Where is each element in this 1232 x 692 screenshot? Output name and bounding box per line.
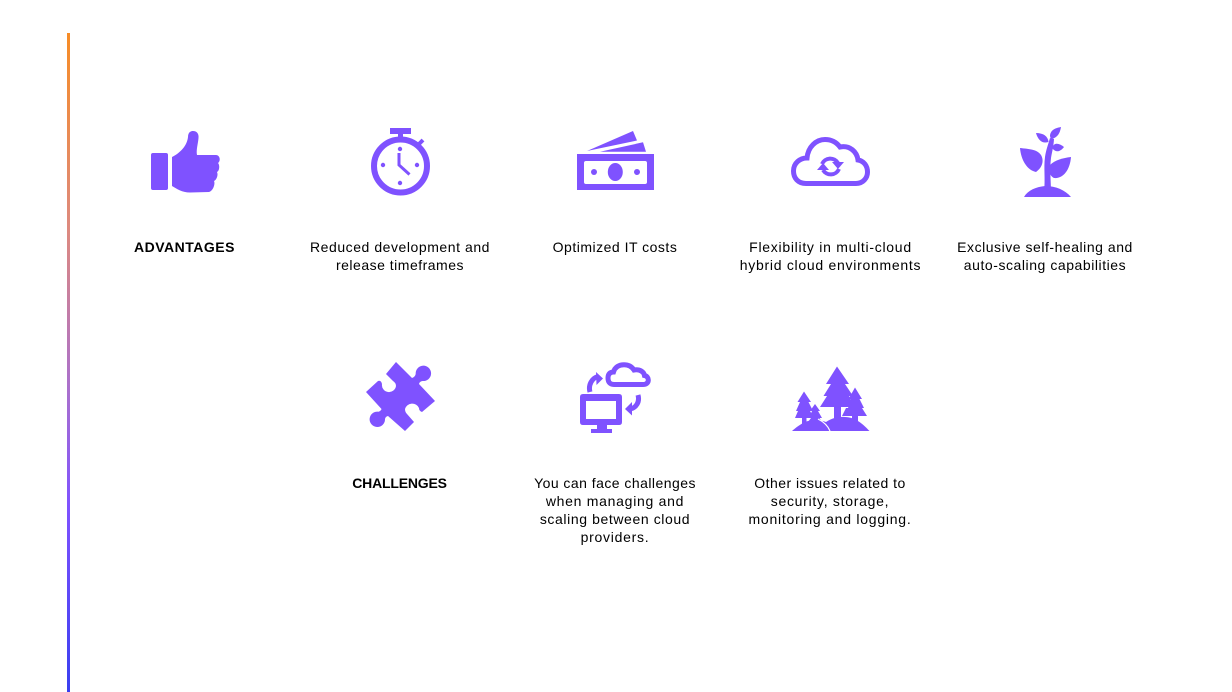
- text: multi-cloud flexibility: [740, 239, 921, 273]
- gradient vertical rule: [67, 33, 70, 692]
- icon: banknotes: [577, 131, 654, 190]
- text: cloud provider challenges: scaling between cloud: [540, 511, 690, 527]
- text: other issues: monitoring and logging.: [748, 511, 912, 527]
- text: cloud provider challenges: providers.: [581, 529, 649, 545]
- icon: cloud with sync arrows: [794, 140, 868, 184]
- heading: challenges: CHALLENGES: [352, 475, 447, 491]
- text: self-healing: Exclusive self-healing and: [957, 239, 1133, 255]
- icon: puzzle piece: [366, 362, 435, 431]
- text: cloud provider challenges: You can face challenges: [534, 475, 696, 491]
- text: self-healing: [957, 239, 1133, 273]
- text: reduced development: release timeframes: [336, 257, 464, 273]
- heading: advantages: ADVANTAGES: [134, 239, 235, 255]
- text: optimized IT costs: Optimized IT costs: [553, 239, 677, 255]
- icon: sprouting plant: [1020, 127, 1071, 197]
- text: multi-cloud flexibility: Flexibility in multi-cloud: [749, 239, 912, 255]
- icon: forest of pine trees: [792, 366, 870, 431]
- text: other issues: Other issues related to: [754, 475, 906, 491]
- text: multi-cloud flexibility: hybrid cloud environments: [740, 257, 921, 273]
- icon: monitor and cloud exchange: [580, 365, 648, 433]
- text: cloud provider challenges: [534, 475, 696, 545]
- icon: stopwatch: [374, 128, 427, 192]
- text: reduced development: [310, 239, 490, 273]
- text: other issues: [748, 475, 912, 527]
- text: reduced development: Reduced development and: [310, 239, 490, 255]
- text: self-healing: auto-scaling capabilities: [964, 257, 1126, 273]
- icon: thumbs up: [151, 131, 220, 192]
- text: cloud provider challenges: when managing and: [546, 493, 684, 509]
- text: other issues: security, storage,: [771, 493, 889, 509]
